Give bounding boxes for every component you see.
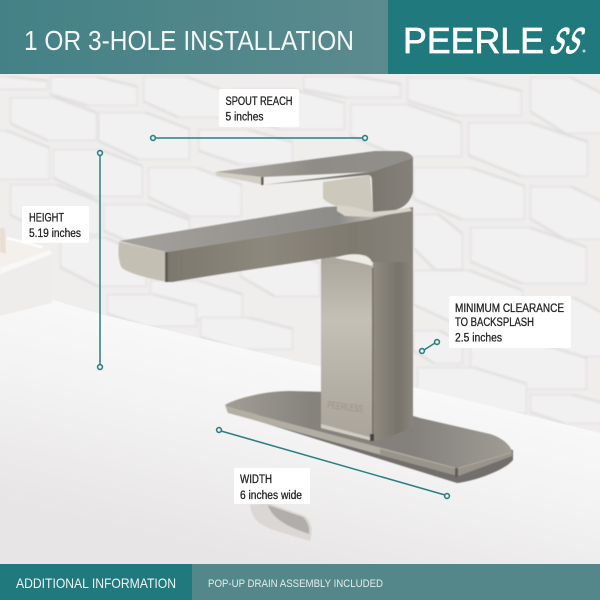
label: height: 5.19 inches (29, 228, 81, 240)
footer bar (0, 564, 600, 600)
label: minimum clearance: TO BACKSPLASH (455, 317, 534, 329)
counter surface (0, 300, 600, 564)
label: spout reach: 5 inches (226, 112, 264, 124)
footer: detail text: POP-UP DRAIN ASSEMBLY INCLUDED (208, 578, 383, 590)
dimension: height line (98, 151, 102, 369)
label: minimum clearance (449, 296, 571, 348)
faucet: body column (321, 207, 413, 441)
soap dish at left edge (0, 228, 52, 316)
label: width: WIDTH (240, 474, 272, 486)
label: minimum clearance: MINIMUM CLEARANCE (455, 303, 564, 315)
label: height: HEIGHT (29, 212, 64, 224)
dimension: width line (217, 428, 449, 498)
label: minimum clearance: 2.5 inches (455, 332, 502, 344)
footer: heading: ADDITIONAL INFORMATION (16, 575, 176, 591)
heading: 1 OR 3-HOLE INSTALLATION (24, 25, 354, 56)
footer: heading panel (0, 564, 192, 600)
faucet: handle (215, 151, 413, 217)
header: logo panel (388, 0, 600, 74)
label: spout reach: SPOUT REACH (226, 96, 292, 108)
footer: detail panel (192, 564, 600, 600)
label: spout reach (219, 89, 299, 127)
logo: SS (544, 21, 591, 61)
header bar (0, 0, 600, 74)
header: title panel (0, 0, 388, 74)
label: width: 6 inches wide (240, 490, 302, 502)
label: height (22, 206, 89, 243)
faucet: spout (118, 206, 413, 282)
faucet: deck plate (225, 391, 513, 483)
label: width (234, 468, 310, 504)
sink overflow opening (250, 503, 312, 541)
logo: PEERLE (403, 20, 544, 61)
faucet (118, 151, 513, 483)
faucet: engraved brand mark: PEERLESS (327, 400, 364, 415)
dimension: backsplash clearance line (420, 340, 439, 353)
dimension: spout reach line (151, 136, 367, 140)
